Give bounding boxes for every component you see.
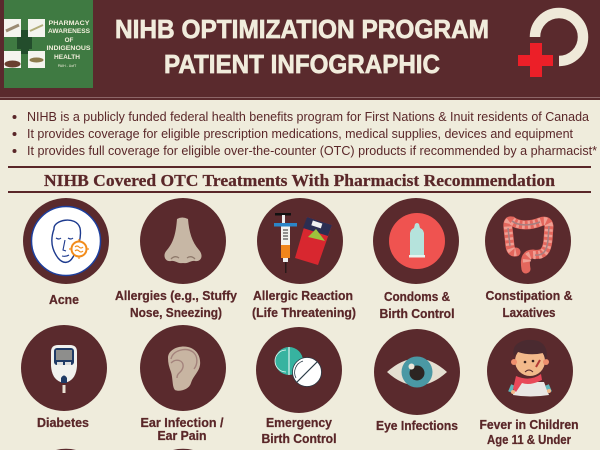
item: allergic reaction: (Life Threatening) [252,306,356,320]
item: allergies: Nose, Sneezing) [130,306,222,320]
logo: Pharmacy Awareness of Indigenous Health: PAIH - UofT [58,64,77,68]
logo: Pharmacy Awareness of Indigenous Health: AWARENESS [48,28,90,35]
item: diabetes [21,325,107,430]
item: allergic reaction: Allergic Reaction [253,289,353,303]
item: constipation: Constipation & [486,289,572,303]
bullet list: NIHB is a publicly funded federal health benefits program for First Nations & Inuit residents of Canada [27,110,589,124]
item: condoms: Birth Control [380,307,454,321]
logo: Pharmacy Awareness of Indigenous Health: INDIGENOUS [46,45,90,52]
item: acne: Acne [49,293,79,307]
item: allergies: Allergies (e.g., Stuffy [115,289,237,303]
logo: Pharmacy Awareness of Indigenous Health: HEALTH [54,54,80,61]
item: eye infections [374,329,460,433]
item: fever in children [480,328,578,447]
item: ear infection: Ear Infection / [140,416,224,430]
item: diabetes: Diabetes [37,416,89,430]
header band [0,0,600,100]
next row: circle tops [56,449,193,450]
bullet list: It provides full coverage for eligible over-the-counter (OTC) products if recommended by a pharmacist* [27,144,597,158]
item: ear infection [140,325,226,443]
title [115,14,489,79]
item: acne [23,198,109,307]
item: emergency birth control [256,327,342,446]
logo: Pharmacy Awareness of Indigenous Health: PHARMACY [48,20,90,27]
bullet list: It provides coverage for eligible prescription medications, medical supplies, devices and equipment [27,127,574,141]
title: NIHB OPTIMIZATION PROGRAM [115,14,489,44]
item: condoms [373,198,459,321]
logo: ring and red cross [518,13,583,77]
bullet list [12,110,597,158]
item: constipation [485,198,572,320]
item: constipation: Laxatives [502,306,556,320]
item: emergency birth control: Birth Control [262,432,336,446]
section heading: NIHB Covered OTC Treatments With Pharmacist Recommendation [44,171,556,190]
item: allergies [115,198,237,320]
item: fever in children: Age 11 & Under [487,433,571,447]
item: allergic reaction [252,198,356,320]
title: PATIENT INFOGRAPHIC [164,49,440,79]
logo: Pharmacy Awareness of Indigenous Health [4,0,93,88]
logo: Pharmacy Awareness of Indigenous Health: OF [65,37,74,44]
item: condoms: Condoms & [384,290,450,304]
item: fever in children: Fever in Children [480,418,578,432]
item: emergency birth control: Emergency [266,416,332,430]
item: eye infections: Eye Infections [376,419,458,433]
item: ear infection: Ear Pain [158,429,206,443]
